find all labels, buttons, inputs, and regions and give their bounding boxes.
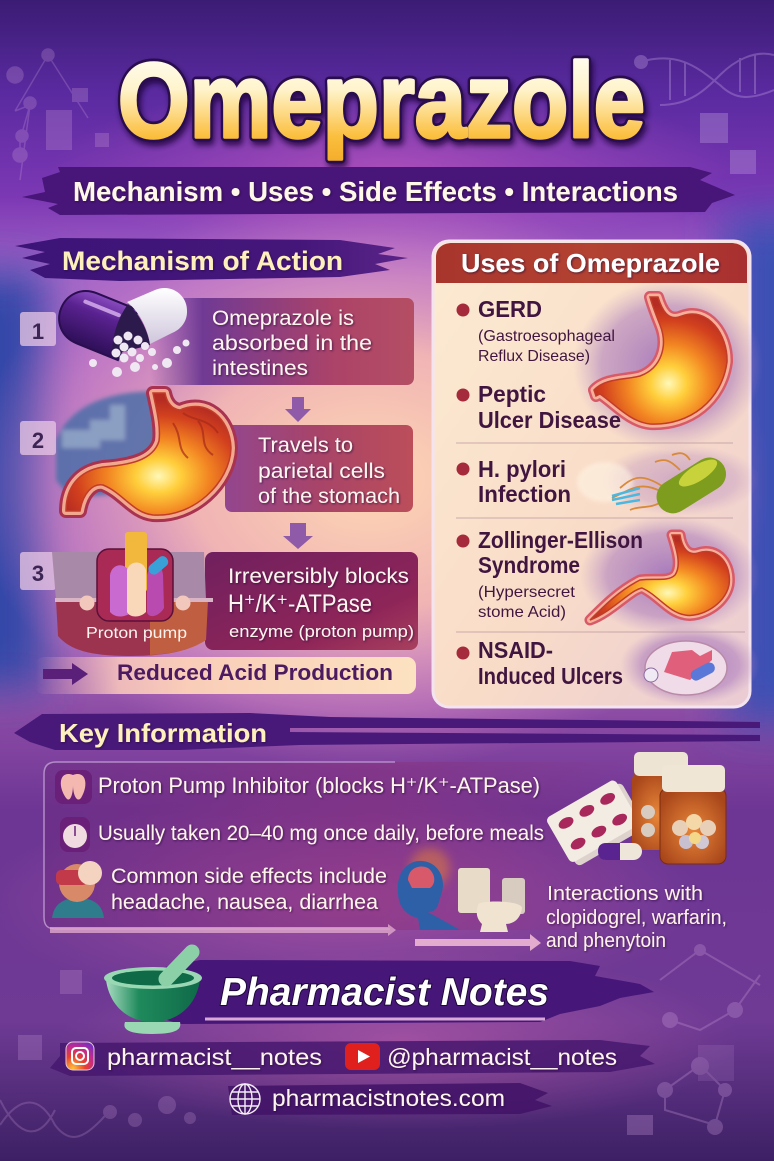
step 1 number: 1 (32, 319, 44, 344)
decoration: molecule network bottom right (627, 945, 760, 1135)
icon: youtube (345, 1043, 380, 1070)
step 1 text (212, 307, 372, 380)
text: drug class: Proton Pump Inhibitor (blocks H⁺/K⁺-ATPase) (98, 773, 540, 798)
icon: open capsule (51, 283, 189, 377)
icon: instagram (66, 1042, 94, 1070)
use: h. pylori: Infection (478, 481, 571, 507)
text: side effects: Common side effects include (111, 865, 387, 888)
icon: mortar and pestle (104, 952, 202, 1034)
step 2 text: parietal cells (258, 460, 385, 483)
icon: toilet (458, 868, 525, 932)
text: interactions (546, 883, 727, 952)
arrow: step 1 to step 2 (285, 397, 311, 422)
icon: person with headache (52, 861, 104, 918)
step 1 text: absorbed in the (212, 332, 372, 355)
lavender backdrops (573, 280, 763, 705)
arrow: result (43, 663, 88, 685)
icon: stomach (66, 393, 231, 515)
use: peptic ulcer: Ulcer Disease (478, 407, 621, 433)
use: GERD (456, 296, 615, 365)
step 3 text: Irreversibly blocks (228, 565, 409, 588)
panel: uses of omeprazole (433, 241, 763, 707)
step 3 number (20, 552, 56, 590)
step 2 text (258, 434, 400, 508)
step 3 text: H⁺/K⁺-ATPase (228, 590, 372, 618)
step 1 text: Omeprazole is (212, 307, 354, 330)
use: h. pylori (456, 456, 571, 507)
youtube handle: @pharmacist__notes (387, 1044, 617, 1070)
blue backdrop (56, 391, 170, 498)
heading: Key Information (14, 713, 760, 750)
step 3 text: enzyme (proton pump) (229, 622, 414, 641)
step 2 number: 2 (32, 428, 44, 453)
text: interactions: and phenytoin (546, 930, 666, 952)
title: Omeprazole (118, 42, 645, 160)
use: nsaid ulcers: NSAID- (478, 637, 553, 663)
icon: nsaid pills (644, 641, 727, 695)
use: peptic ulcer: Peptic (478, 381, 546, 407)
icon: proton pump inhibitor (55, 770, 92, 804)
use: zollinger-ellison: Syndrome (478, 552, 580, 578)
text: interactions: clopidogrel, warfarin, (546, 907, 727, 929)
proton pump label: Proton pump (86, 625, 187, 642)
icon: head (398, 848, 460, 930)
website banner (228, 1083, 552, 1115)
divider (456, 443, 745, 632)
icon: stomach zollinger-ellison (590, 535, 729, 620)
icon: clock (60, 817, 90, 852)
website url: pharmacistnotes.com (272, 1085, 505, 1111)
step 2 text: of the stomach (258, 485, 400, 508)
heading: Mechanism of Action: Mechanism of Action (62, 246, 343, 276)
step 1 number (20, 312, 56, 346)
use: GERD: Reflux Disease) (478, 348, 590, 365)
text: dosing: Usually taken 20–40 mg once daily, before meals (98, 822, 544, 845)
subtitle banner: Mechanism • Uses • Side Effects • Interactions (73, 176, 678, 207)
step 1 text: intestines (212, 357, 308, 380)
text: side effects: headache, nausea, diarrhea (111, 891, 378, 914)
decoration: DNA top right (635, 54, 774, 174)
social banner (50, 1040, 655, 1076)
use: zollinger-ellison (456, 527, 643, 621)
brand name: Pharmacist Notes (220, 971, 549, 1014)
icon: blister pack and bottles (545, 752, 726, 869)
icon: stomach gerd (594, 297, 727, 424)
use: GERD: GERD (478, 296, 542, 322)
use: nsaid ulcers (456, 637, 623, 689)
brand banner (150, 960, 654, 1024)
result bar: reduced acid production (35, 657, 416, 694)
use: peptic ulcer (456, 381, 621, 433)
use: GERD: (Gastroesophageal (478, 328, 615, 345)
result bar: reduced acid production: Reduced Acid Production (117, 660, 393, 685)
icon: proton pump (52, 532, 213, 656)
text: interactions: Interactions with (547, 883, 703, 905)
arrow: side effects (50, 924, 396, 936)
use: h. pylori: H. pylori (478, 456, 566, 482)
decoration: DNA bottom left (0, 970, 195, 1137)
step 1 panel (20, 283, 414, 385)
step 3 panel (20, 532, 418, 656)
step 3 number: 3 (32, 561, 44, 586)
icon: globe (230, 1084, 260, 1114)
step 2 text: Travels to (258, 434, 353, 457)
heading: Key Information: Key Information (59, 718, 267, 748)
text: side effects (111, 865, 387, 914)
subtitle banner (22, 167, 735, 215)
step 2 number (20, 421, 56, 455)
icon: bacterium (577, 451, 732, 520)
arrow: step 2 to step 3 (283, 523, 313, 549)
arrow: interactions (415, 934, 541, 951)
instagram handle: pharmacist__notes (107, 1044, 322, 1070)
use: nsaid ulcers: Induced Ulcers (478, 663, 623, 689)
panel heading (436, 243, 747, 283)
use: zollinger-ellison: (Hypersecret (478, 584, 576, 601)
use: zollinger-ellison: stome Acid) (478, 604, 566, 621)
use: zollinger-ellison: Zollinger-Ellison (478, 527, 643, 553)
step 3 text (228, 565, 414, 641)
panel: key information box (44, 762, 727, 952)
decoration: molecule top left (7, 49, 109, 180)
step 2 panel (20, 391, 413, 515)
heading: Mechanism of Action (15, 238, 408, 281)
title: Omeprazole (118, 42, 645, 160)
panel heading: Uses of Omeprazole (461, 248, 720, 278)
